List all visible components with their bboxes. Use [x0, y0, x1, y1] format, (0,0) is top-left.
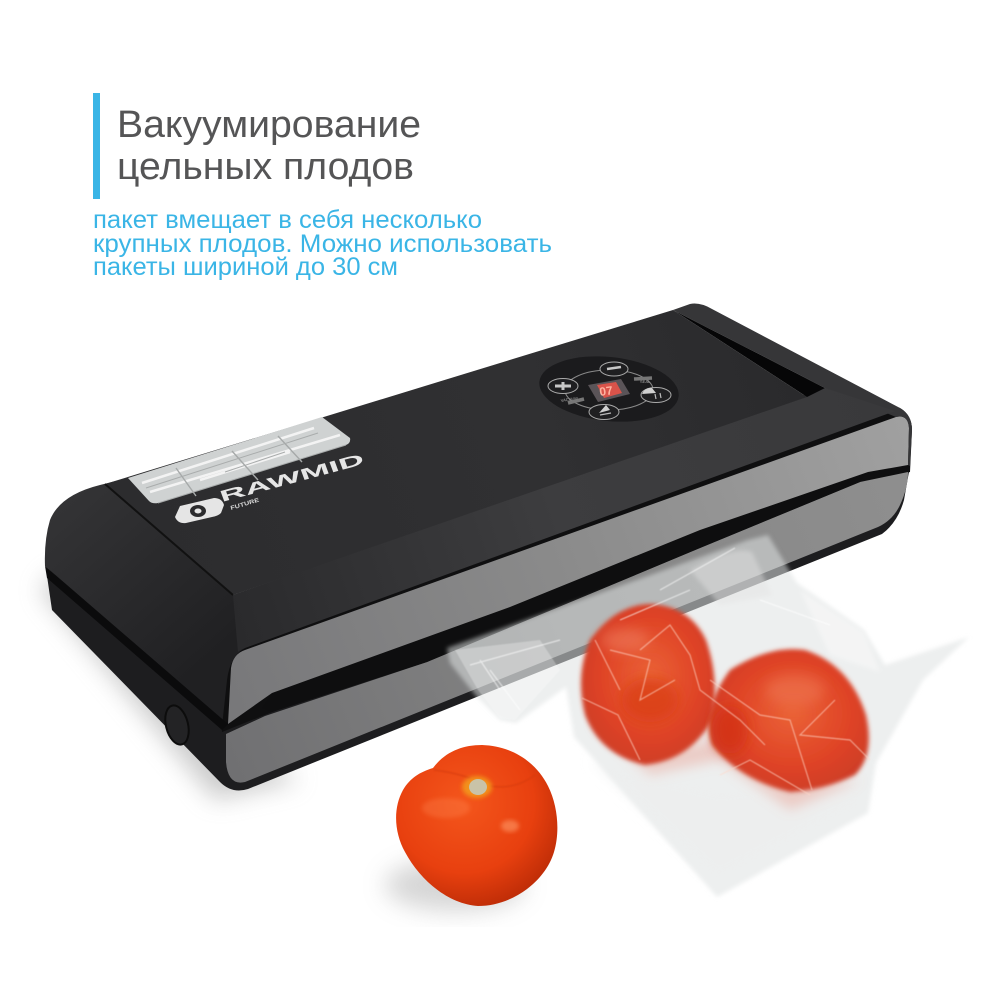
bag film: [447, 535, 969, 897]
upper bag highlights: [690, 550, 772, 605]
film lower fold: [590, 760, 866, 880]
loose tomato: [396, 745, 557, 906]
left end cap: [45, 478, 245, 726]
stem scar: [469, 779, 487, 795]
minus button: [600, 362, 628, 376]
right end cap: [673, 304, 912, 466]
lower front face: [226, 472, 908, 783]
tomato shading: [601, 628, 825, 754]
dark backing of lid: [215, 388, 912, 732]
logo: RAWMID: [217, 450, 367, 505]
logo: [175, 450, 367, 523]
tomato in bag left: [581, 604, 715, 765]
top panel: [105, 310, 807, 595]
control panel: [536, 350, 682, 428]
plus button: [548, 378, 578, 394]
film tail folds: [455, 640, 560, 720]
front strip of lid: [233, 388, 895, 652]
tomato shadow: [385, 859, 525, 911]
description text: пакет вмещает в себя несколько: [93, 206, 482, 234]
seal button: [641, 388, 671, 402]
upper front face: [228, 416, 909, 724]
accent bar: [93, 93, 100, 199]
pink glow under tomatoes: [590, 720, 860, 810]
vacuum bag: [447, 535, 969, 897]
title: цельных плодов: [117, 146, 414, 188]
seal label: [634, 378, 652, 384]
tomato in bag right: [709, 649, 869, 792]
lower base: [47, 466, 910, 790]
title: Вакуумирование: [117, 104, 421, 146]
description text: крупных плодов. Можно использовать: [93, 230, 552, 258]
vacuum label: VACUUM: [560, 396, 578, 403]
transparent window: [128, 417, 350, 503]
start button: [589, 404, 619, 420]
slot: [262, 473, 866, 712]
description text: пакеты шириной до 30 см: [93, 253, 398, 281]
power button: [161, 703, 193, 747]
seal label: SEAL: [640, 379, 651, 384]
display: 07: [598, 383, 614, 399]
vacuum sealer: [45, 304, 912, 790]
title: [117, 104, 421, 188]
film wrinkles: [582, 625, 870, 795]
device shadow: [40, 570, 300, 800]
recessed black gap: [673, 310, 825, 397]
display: [588, 379, 630, 402]
logo: FUTURE: [230, 497, 260, 512]
description text: [93, 206, 552, 281]
